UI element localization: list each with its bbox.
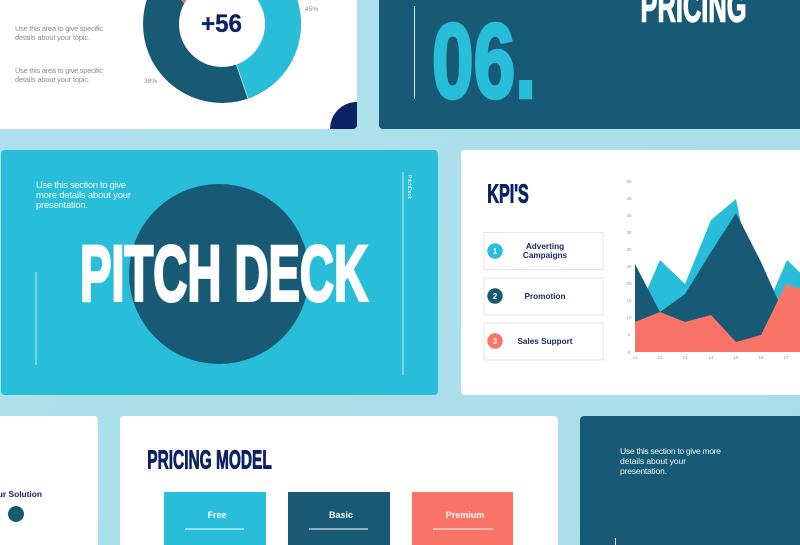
circle backdrop (129, 184, 309, 364)
text block: intro: Use this section to give (36, 179, 126, 190)
text block: second detail: Use this area to give specific (15, 66, 103, 75)
vertical label: PitchDeck (406, 175, 412, 200)
x axis labels: 15 (733, 355, 739, 360)
KPI item 3 (484, 323, 603, 360)
donut chart (143, 0, 301, 103)
y axis labels: 25 (626, 264, 632, 269)
y axis labels: 40 (626, 213, 632, 218)
heading: PRICING MODEL (147, 444, 272, 474)
plan: free (164, 492, 266, 545)
x axis labels: 12 (657, 355, 663, 360)
panel: pitch deck cover (1, 150, 438, 395)
panel: KPIs (461, 150, 800, 395)
KPI item 3: Sales Support (517, 337, 573, 346)
KPI item 2: 2 (493, 292, 498, 301)
panel: solution slide (0, 416, 98, 545)
panel: section 06 pricing (379, 0, 800, 129)
KPI item 2 (484, 278, 603, 315)
y axis labels: 0 (628, 350, 631, 355)
KPI item 1: Adverting (526, 242, 564, 251)
text block: second detail: details about your topic. (15, 75, 90, 84)
x axis labels: 14 (708, 355, 714, 360)
label: 45%: 45% (305, 6, 318, 13)
panel: donut chart slide (0, 0, 357, 129)
corner accent (330, 102, 357, 129)
panel: details slide: Use this section to give more (620, 446, 721, 456)
y axis labels: 35 (626, 230, 632, 235)
panel: details slide: presentation. (620, 466, 667, 476)
panel: details slide: details about your (620, 456, 686, 466)
y axis labels: 15 (626, 298, 632, 303)
area chart (626, 179, 800, 360)
KPI item 3: 3 (493, 337, 498, 346)
x axis labels: 17 (783, 355, 789, 360)
plan: basic: Basic (329, 510, 353, 520)
x axis labels (633, 355, 789, 360)
text block: first detail: details about your topic. (15, 33, 90, 42)
y axis labels: 20 (626, 281, 632, 286)
text block: intro: more details about your (36, 189, 131, 200)
panel: pricing model (120, 416, 558, 545)
panel: details slide (580, 416, 800, 545)
KPI item 1: Campaigns (523, 251, 568, 260)
y axis labels: 30 (626, 247, 632, 252)
x axis labels: 13 (682, 355, 688, 360)
plan: premium: Premium (446, 510, 484, 520)
donut centre value: +56 (201, 10, 242, 38)
section number: 06. (432, 2, 536, 120)
x axis labels: 16 (758, 355, 764, 360)
plan: premium (412, 492, 513, 545)
plan: free: Free (207, 510, 227, 520)
y axis labels: 45 (626, 196, 632, 201)
y axis labels: 50 (626, 179, 632, 184)
main title: PITCH DECK (80, 228, 368, 318)
label: 38%: 38% (144, 78, 157, 85)
plan: basic (288, 492, 390, 545)
text block: intro: presentation. (36, 199, 88, 210)
KPI item 1 (484, 232, 603, 270)
x axis labels: 11 (633, 355, 638, 360)
heading: KPI'S (487, 178, 529, 208)
y axis labels: 5 (628, 332, 631, 337)
KPI item 1: 1 (493, 247, 498, 256)
text block: first detail: Use this area to give specific (15, 24, 103, 33)
y axis labels (626, 179, 632, 355)
KPI item 2: Promotion (525, 292, 565, 301)
y axis labels: 10 (626, 315, 632, 320)
